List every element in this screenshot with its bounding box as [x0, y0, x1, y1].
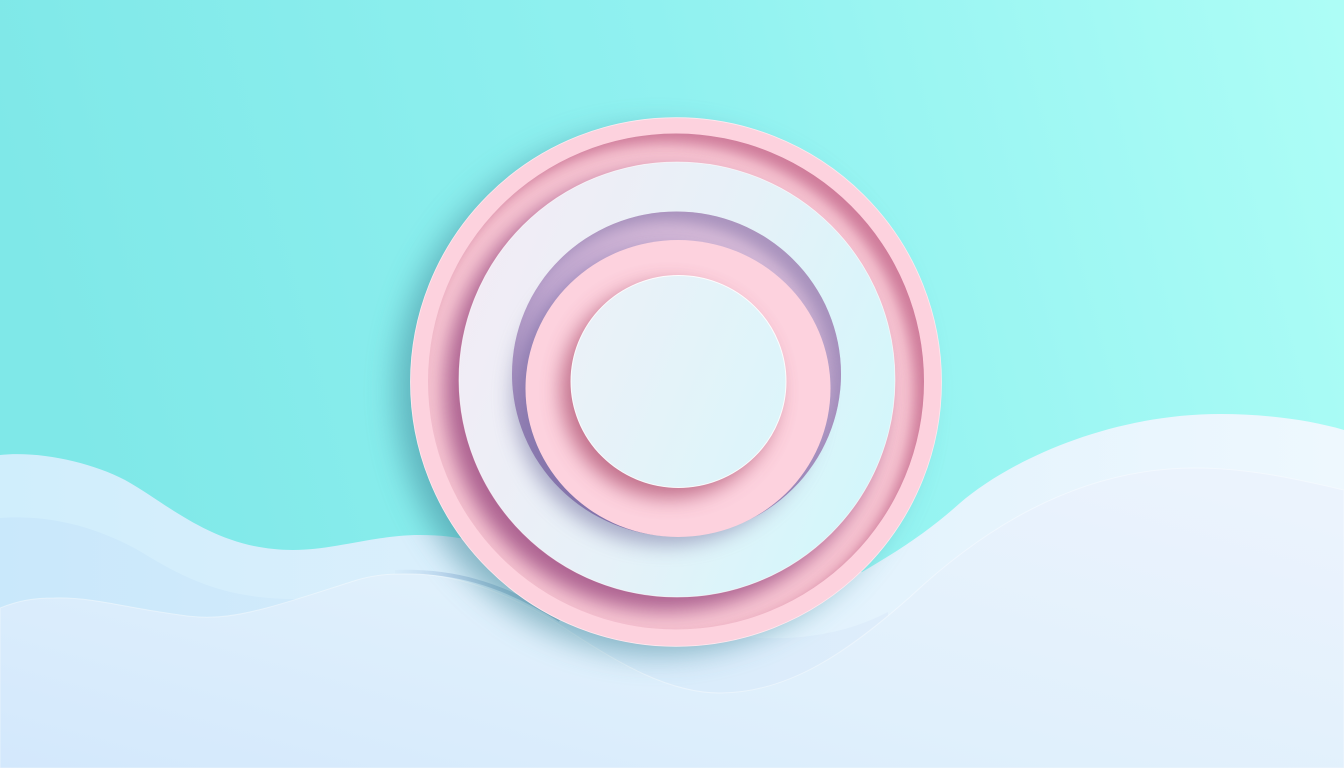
shadow: pink disc on cream disc — [502, 322, 820, 556]
outer pink ring — [410, 118, 942, 646]
recessed pink band — [428, 134, 924, 630]
concentric circle graphic — [410, 117, 942, 647]
inner pink disc — [526, 240, 830, 537]
purple hollow — [512, 212, 841, 535]
wave: middle layer — [0, 517, 888, 768]
shadow: main disc cast on background — [396, 130, 920, 654]
cream disc — [459, 162, 895, 597]
wave: blue edge behind front layer — [395, 572, 560, 620]
wave: front layer — [0, 468, 1344, 768]
center disc — [571, 276, 786, 488]
shadow: center disc on pink disc — [561, 284, 777, 498]
wave: back layer — [0, 414, 1344, 768]
